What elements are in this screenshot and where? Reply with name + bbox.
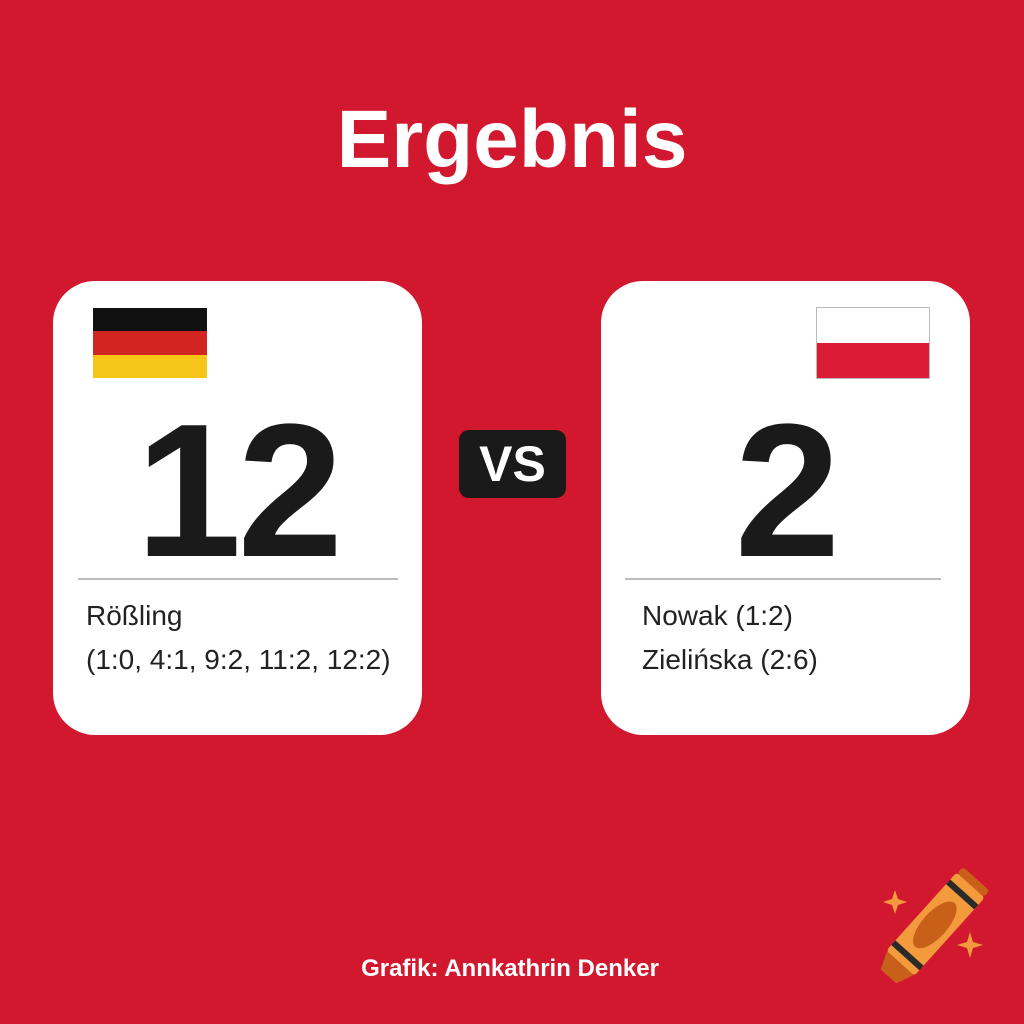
scorers: Poland	[642, 600, 818, 675]
scorers: Germany: Rößling	[86, 600, 182, 631]
icon: Polish flag	[816, 307, 930, 379]
VS badge	[459, 430, 566, 498]
icon: German flag	[93, 308, 207, 378]
scorers: Poland: Nowak (1:2)	[642, 600, 793, 631]
scorers: Germany: (1:0, 4:1, 9:2, 11:2, 12:2)	[86, 644, 391, 675]
score: 12: 12	[136, 385, 339, 597]
VS badge: VS	[479, 436, 546, 492]
title: Ergebnis	[337, 94, 687, 185]
panel: Germany	[53, 281, 422, 735]
panel: Poland	[601, 281, 970, 735]
scorers: Germany	[86, 600, 391, 675]
scorers: Poland: Zielińska (2:6)	[642, 644, 818, 675]
footer credit: Grafik: Annkathrin Denker	[361, 955, 659, 982]
score: 2: 2	[735, 385, 836, 597]
icon: crayon	[880, 868, 988, 984]
